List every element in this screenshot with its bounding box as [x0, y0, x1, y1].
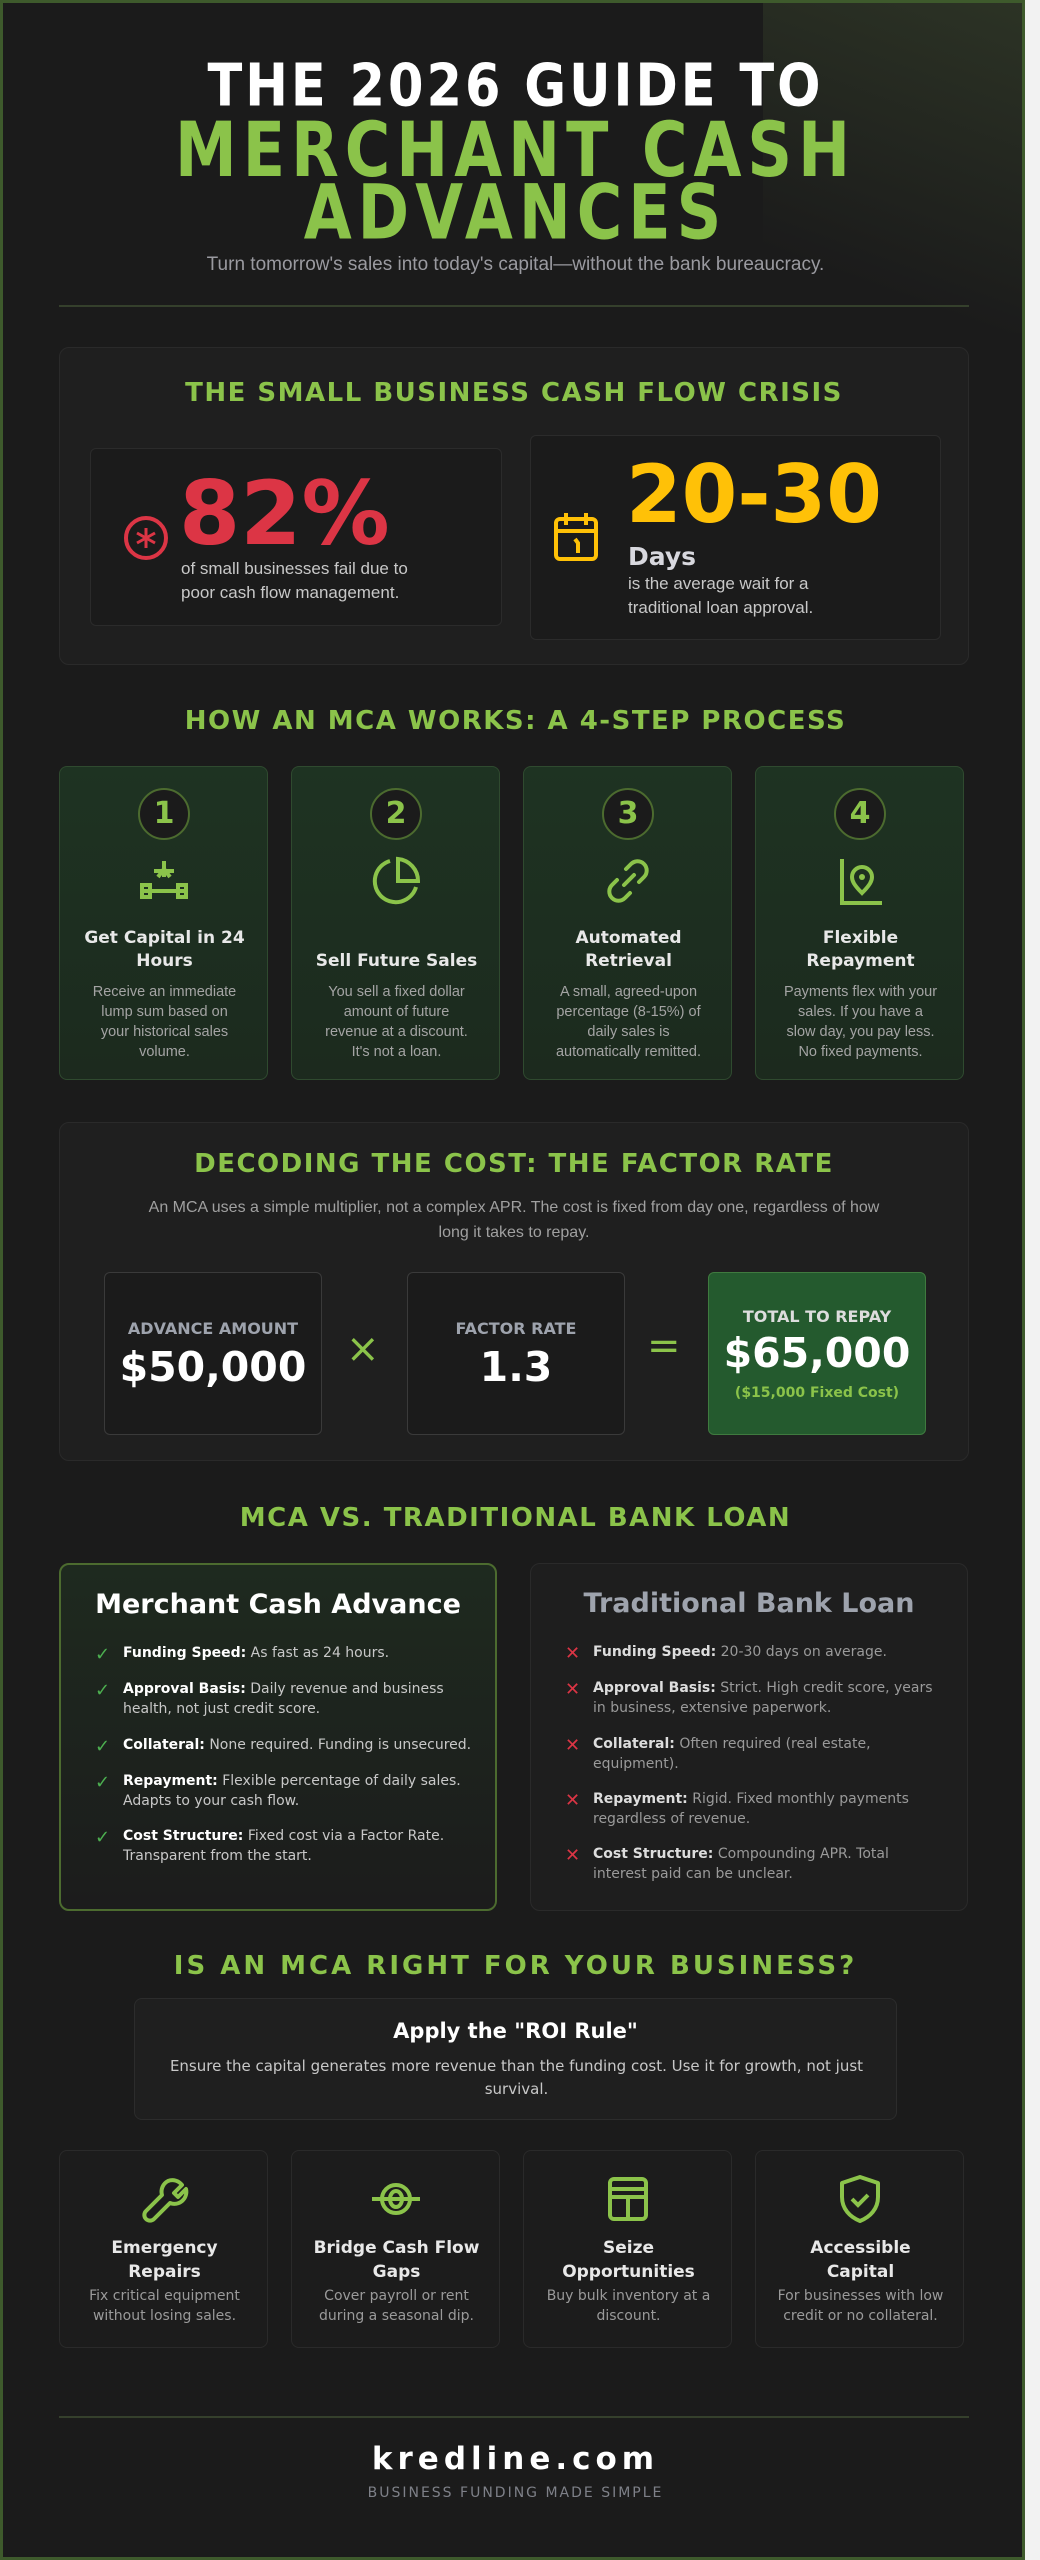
step 4: 4	[850, 796, 870, 831]
panel: MCA: ✓	[95, 1772, 110, 1793]
step 1: Hours	[136, 951, 193, 971]
panel: bank loan: Repayment: Rigid. Fixed monthly payments regardless of revenue.	[593, 1791, 909, 1827]
panel: factor rate	[59, 1122, 969, 1461]
panel: bank loan: ✕	[565, 1790, 580, 1811]
title: ADVANCES	[304, 168, 727, 257]
callout: ROI rule: Ensure the capital generates more revenue than the funding cost. Use it for growth, not just survival.	[170, 2057, 863, 2098]
stat card: 82%	[90, 448, 502, 626]
card: emergency repairs: Emergency	[111, 2238, 218, 2258]
card: bridge gaps: Bridge Cash Flow	[314, 2238, 479, 2258]
panel: bank loan: ✕	[565, 1735, 580, 1756]
subtitle: Turn tomorrow's sales into today's capital—without the bank bureaucracy.	[207, 254, 824, 275]
card: seize opportunities: Opportunities	[562, 2262, 695, 2282]
panel: MCA: Repayment: Flexible percentage of daily sales. Adapts to your cash flow.	[123, 1773, 461, 1809]
card: seize opportunities	[523, 2150, 732, 2348]
panel: bank loan: Funding Speed: 20-30 days on average.	[593, 1644, 887, 1660]
panel: bank loan: Approval Basis: Strict. High credit score, years in business, extensive paperwork.	[593, 1680, 933, 1716]
step 2	[291, 766, 500, 1080]
panel: MCA: ✓	[95, 1680, 110, 1701]
card: seize opportunities: Buy bulk inventory at a discount.	[547, 2288, 710, 2324]
panel: MCA	[59, 1563, 497, 1911]
box: total to repay	[708, 1272, 926, 1435]
panel: bank loan: Collateral: Often required (real estate, equipment).	[593, 1736, 871, 1772]
panel: MCA: Collateral: None required. Funding is unsecured.	[123, 1737, 471, 1753]
stat card: 20-30 days: is the average wait for a	[628, 574, 808, 593]
panel: bank loan: Cost Structure: Compounding APR. Total interest paid can be unclear.	[593, 1846, 889, 1882]
step 3: A small, agreed-upon percentage (8-15%) of daily sales is automatically remitted.	[556, 984, 701, 1060]
box: factor rate: FACTOR RATE	[456, 1319, 576, 1338]
panel: bank loan	[530, 1563, 968, 1911]
title: MERCHANT CASH	[175, 105, 856, 194]
icon: pie	[372, 856, 420, 904]
card: emergency repairs	[59, 2150, 268, 2348]
box: total to repay: ($15,000 Fixed Cost)	[735, 1385, 899, 1401]
stat card: 20-30 days: traditional loan approval.	[628, 598, 813, 617]
panel: bank loan: ✕	[565, 1679, 580, 1700]
heading: factor rate: DECODING THE COST: THE FACTOR RATE	[194, 1149, 834, 1179]
heading: 4-step process: HOW AN MCA WORKS: A 4-STEP PROCESS	[185, 706, 846, 736]
panel: MCA: Cost Structure: Fixed cost via a Factor Rate. Transparent from the start.	[123, 1828, 444, 1864]
stat card: 82%: of small businesses fail due to	[181, 559, 408, 578]
heading: comparison: MCA VS. TRADITIONAL BANK LOAN	[240, 1503, 791, 1533]
card: bridge gaps	[291, 2150, 500, 2348]
card: seize opportunities: Seize	[603, 2238, 654, 2258]
box: factor rate: 1.3	[480, 1343, 552, 1391]
icon: chart pin	[840, 859, 882, 905]
heading: right for you: IS AN MCA RIGHT FOR YOUR BUSINESS?	[174, 1951, 857, 1981]
icon: calendar	[554, 513, 598, 561]
step 3	[523, 766, 732, 1080]
panel: bank loan: Traditional Bank Loan	[584, 1588, 914, 1619]
box: advance amount: $50,000	[120, 1343, 306, 1391]
icon: capital	[140, 861, 188, 899]
description: An MCA uses a simple multiplier, not a complex APR. The cost is fixed from day one, regardless of how long it takes to repay.	[149, 1199, 879, 1241]
panel: bank loan: ✕	[565, 1845, 580, 1866]
step 2: You sell a fixed dollar amount of future revenue at a discount. It's not a loan.	[325, 984, 468, 1060]
icon: shield	[840, 2175, 880, 2223]
card: accessible capital: For businesses with low credit or no collateral.	[778, 2288, 943, 2324]
step 3: 3	[618, 796, 638, 831]
title	[175, 52, 856, 257]
box: advance amount: ADVANCE AMOUNT	[128, 1319, 298, 1338]
stat card: 20-30 days	[530, 435, 941, 640]
box: advance amount	[104, 1272, 322, 1435]
operator: equals: =	[647, 1323, 681, 1369]
panel: MCA: ✓	[95, 1736, 110, 1757]
icon: wrench	[142, 2178, 188, 2223]
step 2: Sell Future Sales	[316, 951, 477, 971]
step 3: Automated	[575, 928, 682, 948]
panel: MCA: ✓	[95, 1644, 110, 1665]
card: accessible capital	[755, 2150, 964, 2348]
icon: inventory	[608, 2177, 648, 2221]
card: bridge gaps: Cover payroll or rent during a seasonal dip.	[319, 2288, 474, 2324]
icon: alert	[124, 516, 168, 560]
panel: MCA: ✓	[95, 1827, 110, 1848]
card: emergency repairs: Repairs	[128, 2262, 201, 2282]
operator: times: ×	[346, 1326, 380, 1372]
card: accessible capital: Capital	[827, 2262, 894, 2282]
step 4: Flexible	[823, 928, 898, 948]
title: THE 2026 GUIDE TO	[207, 52, 824, 120]
stat card: 82%: poor cash flow management.	[181, 583, 399, 602]
callout: ROI rule: Apply the "ROI Rule"	[393, 2019, 638, 2043]
heading: crisis: THE SMALL BUSINESS CASH FLOW CRISIS	[185, 378, 843, 408]
panel: cash flow crisis	[59, 347, 969, 665]
footer	[368, 2441, 663, 2501]
panel: bank loan: ✕	[565, 1643, 580, 1664]
step 1	[59, 766, 268, 1080]
step 1: Get Capital in 24	[84, 928, 245, 948]
stat card: 82%: 82%	[179, 462, 390, 565]
stat card: 20-30 days: Days	[628, 542, 696, 571]
step 4: Repayment	[806, 951, 915, 971]
step 1: 1	[154, 796, 174, 831]
step 4: Payments flex with your sales. If you have a slow day, you pay less. No fixed payments.	[784, 984, 937, 1060]
card: accessible capital: Accessible	[810, 2238, 911, 2258]
stat card: 20-30 days: 20-30	[626, 448, 882, 541]
step 4	[755, 766, 964, 1080]
icon: bridge	[372, 2183, 420, 2215]
box: total to repay: TOTAL TO REPAY	[743, 1307, 891, 1326]
footer: kredline.com	[372, 2441, 659, 2477]
step 1: Receive an immediate lump sum based on your historical sales volume.	[93, 984, 236, 1060]
panel: MCA: Funding Speed: As fast as 24 hours.	[123, 1645, 389, 1661]
card: bridge gaps: Gaps	[373, 2262, 420, 2282]
panel: MCA: Merchant Cash Advance	[95, 1589, 461, 1620]
box: factor rate	[407, 1272, 625, 1435]
footer: BUSINESS FUNDING MADE SIMPLE	[368, 2485, 663, 2501]
panel: MCA: Approval Basis: Daily revenue and business health, not just credit score.	[123, 1681, 444, 1717]
card: emergency repairs: Fix critical equipment without losing sales.	[89, 2288, 240, 2324]
box: total to repay: $65,000	[724, 1329, 910, 1377]
step 3: Retrieval	[585, 951, 672, 971]
callout: ROI rule	[134, 1998, 897, 2120]
step 2: 2	[386, 796, 406, 831]
icon: link	[607, 859, 649, 903]
